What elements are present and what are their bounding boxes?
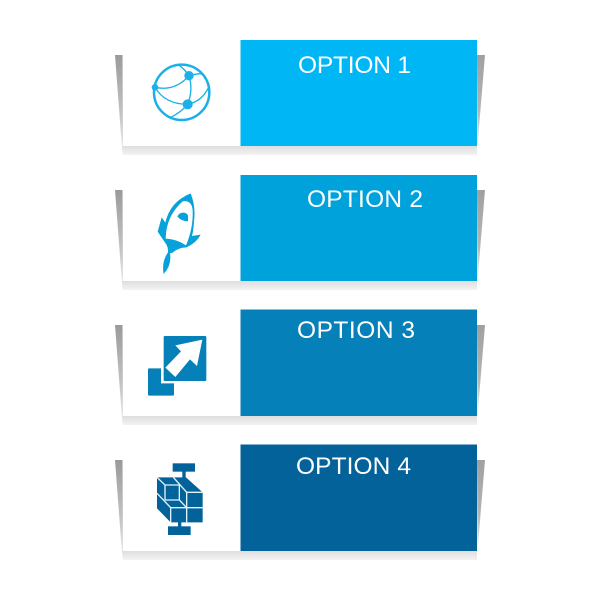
heading: option 1: OPTION 1 bbox=[298, 52, 411, 79]
icon: expand arrow bbox=[148, 336, 206, 396]
colour block bbox=[240, 310, 477, 416]
left shadow tab bbox=[115, 325, 123, 425]
right shadow tab bbox=[477, 325, 485, 416]
panel: option 1 bbox=[115, 40, 485, 155]
bottom shadow bbox=[122, 281, 477, 290]
heading: option 4: OPTION 4 bbox=[296, 453, 411, 480]
icon: cube network bbox=[157, 463, 203, 535]
left shadow tab bbox=[115, 55, 123, 155]
panel: option 3 bbox=[115, 310, 485, 425]
bottom shadow bbox=[122, 146, 477, 155]
bottom shadow bbox=[122, 416, 477, 425]
left shadow tab bbox=[115, 460, 123, 560]
left shadow tab bbox=[115, 190, 123, 290]
heading: option 3: OPTION 3 bbox=[297, 317, 415, 344]
colour block bbox=[240, 40, 477, 146]
icon: globe network bbox=[152, 65, 209, 120]
icon: rocket bbox=[158, 193, 201, 274]
panel: option 2 bbox=[115, 175, 485, 290]
bottom shadow bbox=[122, 551, 477, 560]
heading: option 2: OPTION 2 bbox=[307, 186, 423, 213]
right shadow tab bbox=[477, 460, 485, 551]
colour block bbox=[240, 444, 477, 551]
colour block bbox=[240, 175, 477, 281]
panel: option 4 bbox=[115, 444, 485, 560]
right shadow tab bbox=[477, 55, 485, 146]
right shadow tab bbox=[477, 190, 485, 281]
